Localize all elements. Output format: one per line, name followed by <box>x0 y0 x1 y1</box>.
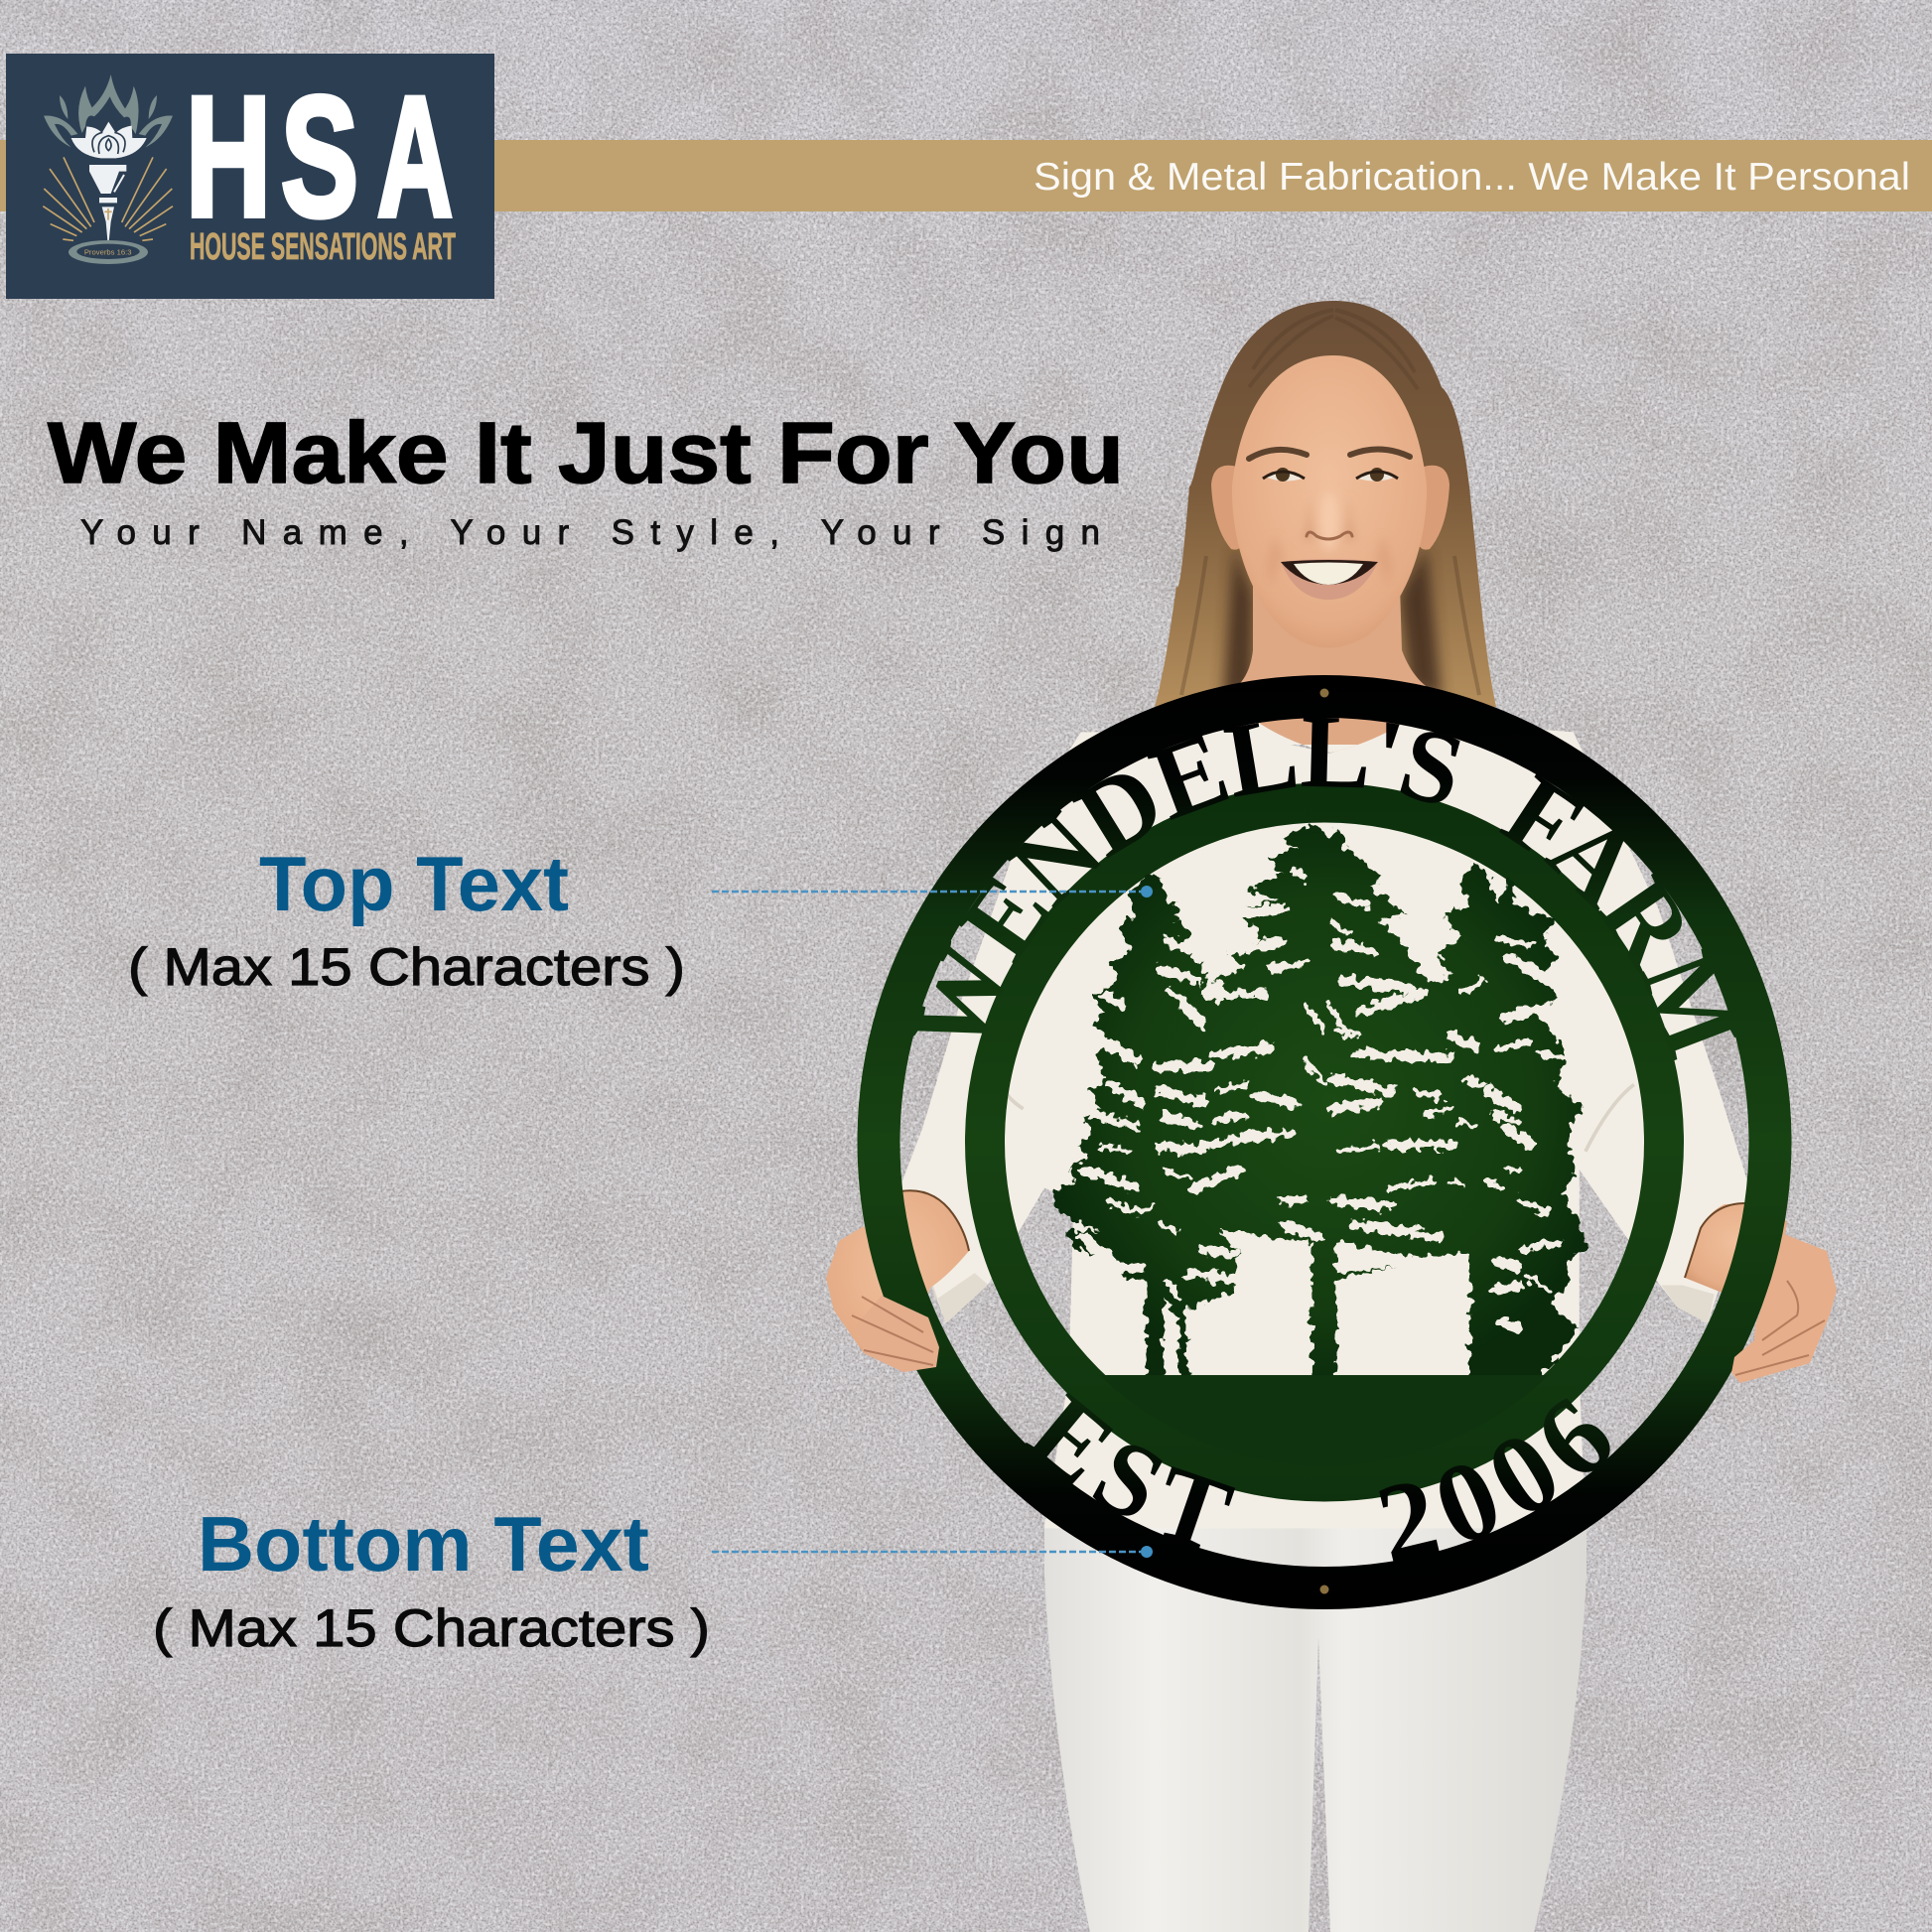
shirt and sleeves <box>899 720 1749 1528</box>
logo wordmark HSA <box>186 62 453 252</box>
icon: torch with lotus flame <box>43 74 173 264</box>
face <box>1232 355 1427 647</box>
left arm and hand <box>826 1190 969 1372</box>
label: top text <box>128 840 685 997</box>
eyes <box>1263 468 1398 482</box>
brows <box>1249 449 1410 459</box>
subheadline: Your Name, Your Style, Your Sign <box>80 513 1100 552</box>
label: bottom text <box>153 1500 710 1658</box>
cheek and nose shading <box>1267 491 1392 586</box>
logo subtitle: HOUSE SENSATIONS ART <box>190 226 456 268</box>
gold banner <box>0 140 1932 211</box>
right hand on sign <box>1731 1234 1837 1383</box>
right arm and hand <box>1685 1203 1787 1294</box>
fingers of left hand <box>852 1296 939 1372</box>
logo wordmark HSA: A <box>377 62 453 252</box>
nose <box>1307 532 1352 539</box>
banner tagline: Sign & Metal Fabrication... We Make It Personal <box>1034 156 1910 199</box>
top text limit: ( Max 15 Characters ) <box>128 938 685 997</box>
outer ring <box>879 697 1770 1588</box>
pants <box>1044 1519 1587 1932</box>
hair <box>1155 301 1496 707</box>
ears <box>1211 466 1449 550</box>
label: bottom text: Bottom Text <box>198 1500 649 1587</box>
hair shadow by neck <box>1223 546 1442 700</box>
inner ring <box>985 802 1664 1481</box>
logo wordmark HSA: S <box>281 62 358 252</box>
callout: bottom text <box>712 1546 1153 1558</box>
bottom sign text left: EST <box>1026 1392 1235 1548</box>
top sign text: WENDELL'S FARM <box>913 718 1735 1060</box>
bottom text limit: ( Max 15 Characters ) <box>153 1599 710 1658</box>
logo wordmark HSA: H <box>186 62 271 252</box>
logo panel <box>6 54 494 299</box>
mounting holes <box>1320 689 1328 1594</box>
bottom sign text right: 2006 <box>1379 1398 1610 1561</box>
trees and ground <box>1052 823 1588 1461</box>
woman holding sign <box>826 301 1787 1932</box>
icon: torch with lotus flame: Proverbs 16:3 <box>84 247 132 256</box>
label: top text: Top Text <box>259 840 569 927</box>
neck <box>1223 586 1442 753</box>
callout: top text <box>712 886 1153 897</box>
metal sign <box>858 675 1791 1609</box>
smile <box>1281 559 1378 600</box>
headline: We Make It Just For You <box>48 405 1124 501</box>
